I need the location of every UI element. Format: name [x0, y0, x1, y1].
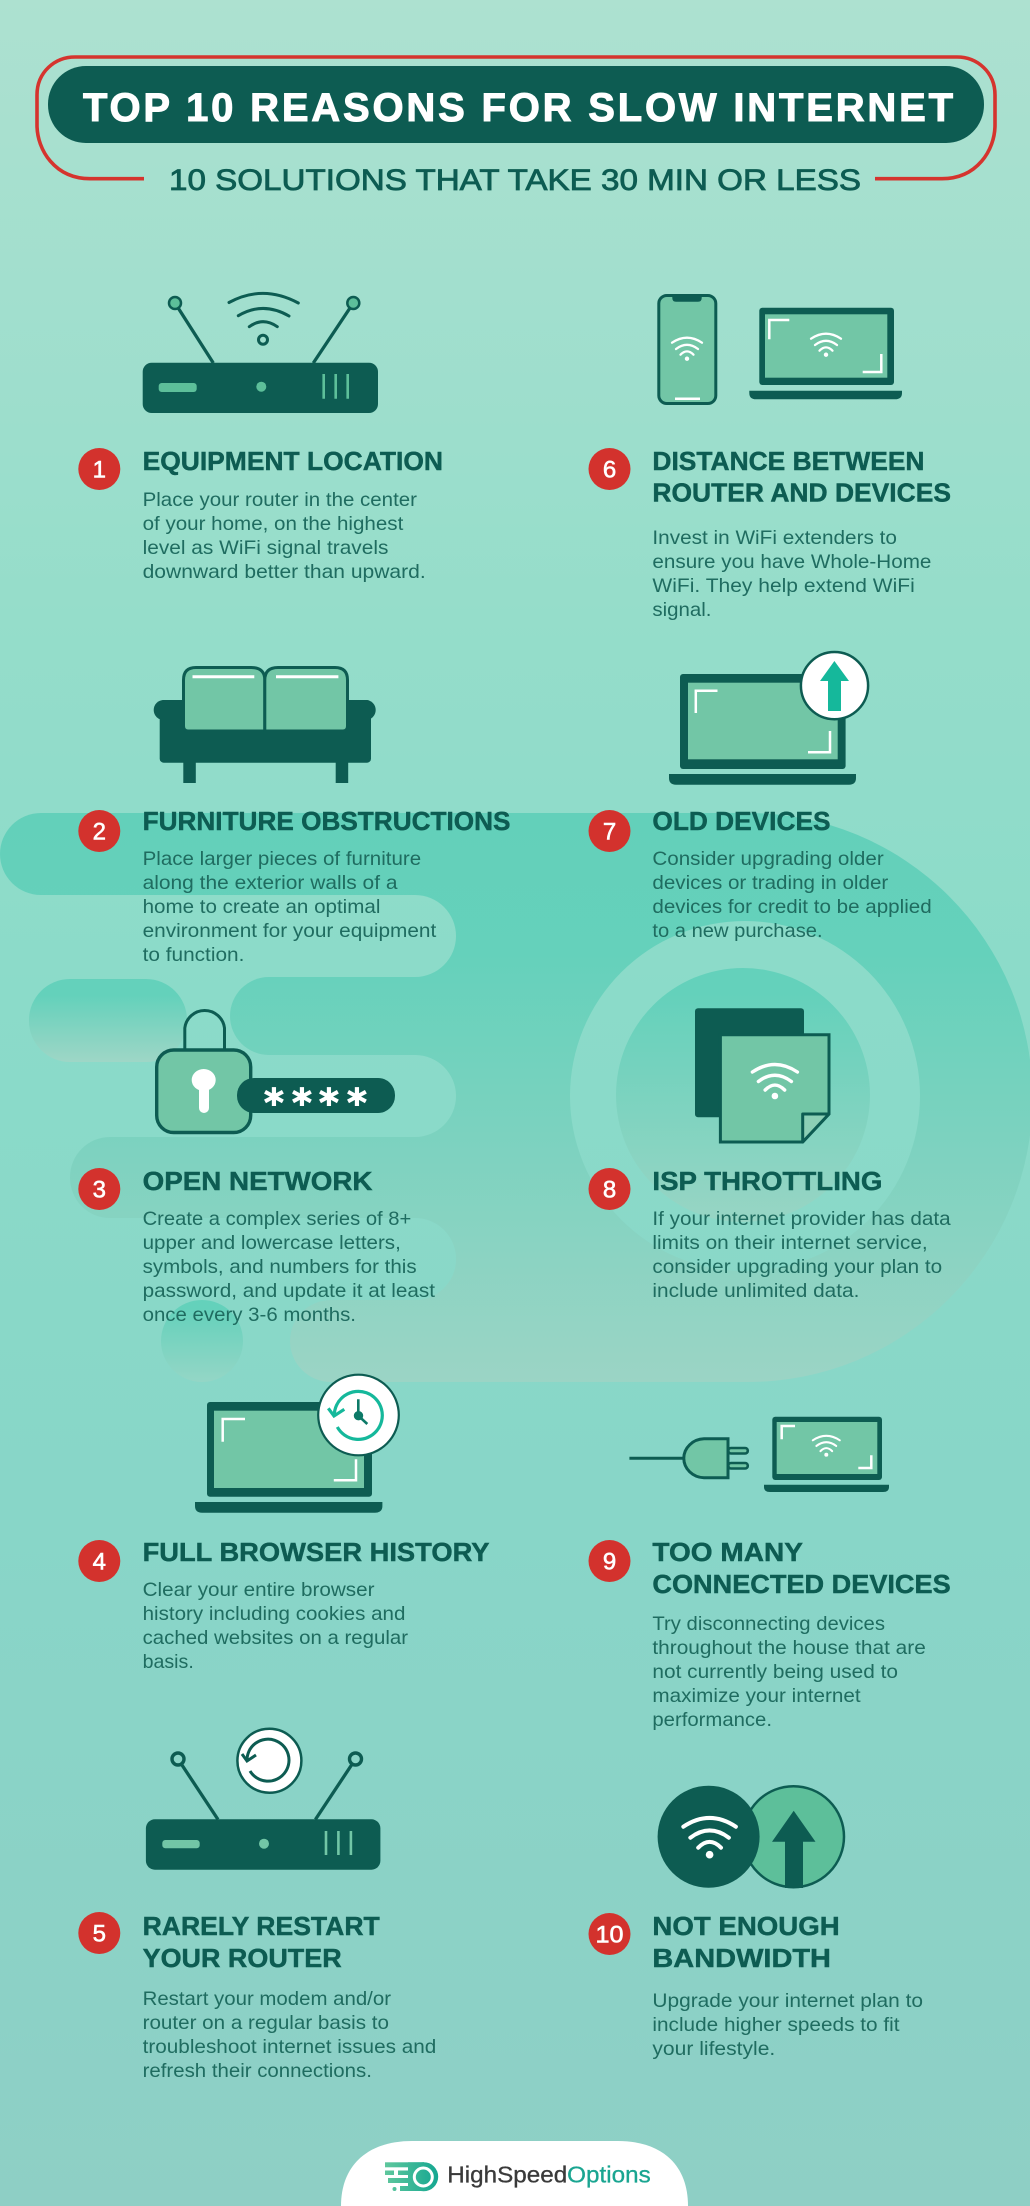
title pill [48, 66, 984, 143]
number badge 1 [78, 448, 120, 490]
icon: router with wifi [143, 293, 378, 413]
body 7: devices for credit to be applied [652, 896, 932, 918]
icon: router with restart [146, 1729, 380, 1870]
heading 10: NOT ENOUGH [652, 1911, 840, 1941]
heading 2: FURNITURE OBSTRUCTIONS [143, 806, 510, 836]
number badge 2 [78, 810, 120, 852]
number badge 8 [588, 1168, 630, 1210]
body 7: devices or trading in older [652, 872, 889, 894]
panel: 2 furniture [78, 668, 511, 966]
heading 10 [652, 1911, 840, 1973]
body 5: refresh their connections. [143, 2060, 372, 2082]
heading 6: DISTANCE BETWEEN [652, 446, 924, 476]
number badge 1: 1 [93, 456, 106, 484]
number badge 7: 7 [603, 818, 616, 846]
body 2 [143, 848, 437, 966]
icon: sofa [154, 668, 376, 783]
icon: logo [385, 2162, 438, 2191]
body 6: ensure you have Whole-Home [652, 551, 931, 573]
number badge 3: 3 [93, 1176, 106, 1204]
body 5: troubleshoot internet issues and [143, 2036, 436, 2058]
body 1: Place your router in the center [143, 489, 418, 511]
heading 4: FULL BROWSER HISTORY [143, 1537, 490, 1567]
number badge 10 [588, 1913, 630, 1955]
heading 6 [652, 446, 951, 508]
number badge 10: 10 [596, 1922, 624, 1948]
red outline frame [37, 57, 995, 179]
panel: 3 open network [78, 1010, 436, 1326]
header [37, 57, 995, 197]
body 7 [652, 848, 932, 942]
heading 5: YOUR ROUTER [143, 1943, 342, 1973]
body 6: Invest in WiFi extenders to [652, 527, 897, 549]
panel: 5 restart router [78, 1729, 436, 2082]
icon: laptop with clock [195, 1375, 399, 1513]
panel: 6 distance [588, 294, 951, 621]
icon: plug and laptop [629, 1417, 889, 1492]
body 9: throughout the house that are [652, 1637, 926, 1659]
body 5 [143, 1988, 436, 2082]
heading 1: EQUIPMENT LOCATION [143, 446, 443, 476]
heading 8: ISP THROTTLING [652, 1166, 882, 1196]
subtitle: 10 SOLUTIONS THAT TAKE 30 MIN OR LESS [169, 164, 861, 197]
body 3 [143, 1208, 436, 1326]
number badge 5 [78, 1912, 120, 1954]
panel: 7 old devices [588, 652, 932, 942]
panel: 9 connected devices [588, 1417, 951, 1731]
body 1: level as WiFi signal travels [143, 537, 389, 559]
body 8: limits on their internet service, [652, 1232, 928, 1254]
body 4: history including cookies and [143, 1603, 405, 1625]
body 2: Place larger pieces of furniture [143, 848, 421, 870]
body 6 [652, 527, 931, 621]
body 6: WiFi. They help extend WiFi [652, 575, 915, 597]
icon: documents with wifi [695, 1008, 829, 1142]
body 8: consider upgrading your plan to [652, 1256, 942, 1278]
body 10: include higher speeds to fit [652, 2014, 900, 2036]
logo text: HighSpeed Options [447, 2162, 651, 2188]
body 2: along the exterior walls of a [143, 872, 398, 894]
body 8 [652, 1208, 951, 1302]
body 1: downward better than upward. [143, 561, 426, 583]
number badge 9 [588, 1540, 630, 1582]
heading 3: OPEN NETWORK [143, 1166, 373, 1196]
heading 5 [143, 1911, 380, 1973]
body 10 [652, 1990, 923, 2060]
body 9: maximize your internet [652, 1685, 861, 1707]
body 9 [652, 1613, 926, 1731]
body 6: signal. [652, 599, 712, 621]
body 2: to function. [143, 944, 244, 966]
number badge 4: 4 [93, 1548, 106, 1576]
number badge 3 [78, 1168, 120, 1210]
heading 5: RARELY RESTART [143, 1911, 380, 1941]
number badge 6 [588, 448, 630, 490]
heading 7: OLD DEVICES [652, 806, 830, 836]
body 3: Create a complex series of 8+ [143, 1208, 411, 1230]
body 4: basis. [143, 1651, 194, 1673]
icon: wifi and upload circles [658, 1786, 844, 1888]
body 7: to a new purchase. [652, 920, 823, 942]
body 10: Upgrade your internet plan to [652, 1990, 923, 2012]
body 1: of your home, on the highest [143, 513, 404, 535]
panel: 1 equipment location [78, 293, 443, 583]
panel: 8 isp throttling [588, 1008, 951, 1302]
body 8: If your internet provider has data [652, 1208, 951, 1230]
body 10: your lifestyle. [652, 2038, 775, 2060]
body 4: cached websites on a regular [143, 1627, 409, 1649]
body 2: environment for your equipment [143, 920, 437, 942]
footer logo tab [341, 2141, 688, 2206]
body 3: password, and update it at least [143, 1280, 436, 1302]
body 5: router on a regular basis to [143, 2012, 389, 2034]
body 5: Restart your modem and/or [143, 1988, 392, 2010]
number badge 7 [588, 810, 630, 852]
heading 9 [652, 1537, 951, 1599]
body 8: include unlimited data. [652, 1280, 859, 1302]
icon: laptop with upload arrow [669, 652, 868, 785]
panel: 4 browser history [78, 1375, 490, 1673]
number badge 9: 9 [603, 1548, 616, 1576]
body 4 [143, 1579, 409, 1673]
heading 9: TOO MANY [652, 1537, 803, 1567]
icon: phone and laptop [659, 294, 902, 404]
heading 9: CONNECTED DEVICES [652, 1569, 951, 1599]
body 4: Clear your entire browser [143, 1579, 375, 1601]
number badge 2: 2 [93, 818, 106, 846]
body 3: once every 3-6 months. [143, 1304, 356, 1326]
body 9: performance. [652, 1709, 772, 1731]
icon: padlock with password [157, 1010, 395, 1132]
number badge 6: 6 [603, 456, 616, 484]
body 3: symbols, and numbers for this [143, 1256, 417, 1278]
heading 10: BANDWIDTH [652, 1943, 831, 1973]
number badge 8: 8 [603, 1176, 616, 1204]
title: TOP 10 REASONS FOR SLOW INTERNET [83, 86, 953, 130]
heading 6: ROUTER AND DEVICES [652, 478, 951, 508]
number badge 5: 5 [93, 1920, 106, 1948]
icon: padlock with password: **** [264, 1081, 367, 1125]
body 3: upper and lowercase letters, [143, 1232, 401, 1254]
body 9: Try disconnecting devices [652, 1613, 885, 1635]
body 9: not currently being used to [652, 1661, 898, 1683]
body 7: Consider upgrading older [652, 848, 884, 870]
panel: 10 bandwidth [588, 1786, 923, 2060]
body 1 [143, 489, 426, 583]
number badge 4 [78, 1540, 120, 1582]
body 2: home to create an optimal [143, 896, 380, 918]
